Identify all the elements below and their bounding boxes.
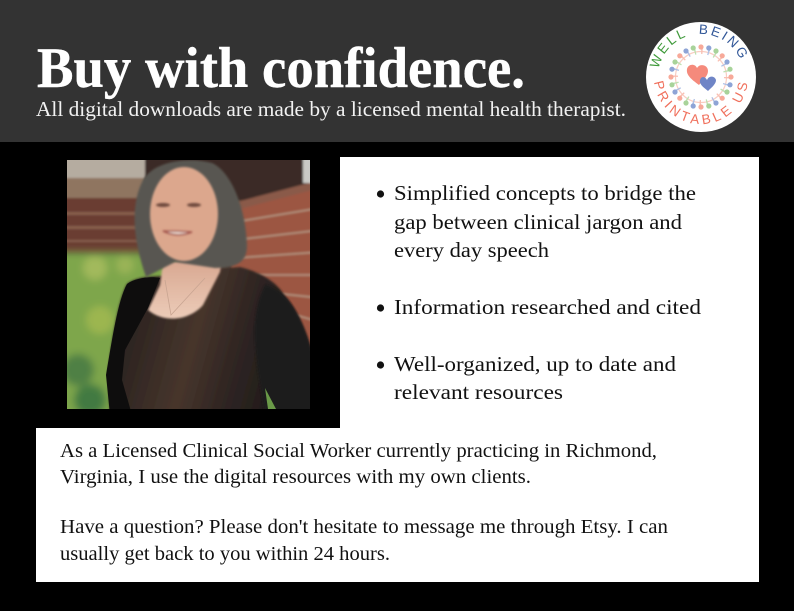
bullet 3: Well-organized, up to date and: [394, 352, 676, 376]
bullet 3: relevant resources: [394, 380, 563, 404]
photo: hair: [135, 160, 247, 277]
bullet 1: Simplified concepts to bridge the: [394, 181, 696, 205]
photo: necklace: [165, 278, 205, 315]
logo badge: [646, 22, 756, 132]
logo text: well being: WELL BEING: [650, 24, 747, 66]
photo: green foliage: [67, 246, 177, 409]
bullet 2: Information researched and cited: [394, 295, 701, 319]
title: Buy with confidence.: [37, 37, 525, 100]
photo: arm shadow: [254, 286, 310, 394]
logo: ring of people: [668, 44, 734, 110]
photo: foliage gap by the arm: [265, 388, 276, 409]
panel: benefits: [340, 157, 759, 439]
logo: coral heart: [687, 65, 708, 85]
photo: face: [150, 167, 218, 261]
about text: usually get back to you within 24 hours.: [60, 544, 390, 565]
photo: background building: [67, 160, 310, 348]
panel: about the therapist: [36, 428, 759, 582]
photo: jacket lapel: [106, 277, 160, 415]
about text: [60, 441, 668, 565]
photo: black top: [108, 267, 312, 415]
photo: eyes and smile: [156, 203, 201, 235]
about text: Have a question? Please don't hesitate to message me through Etsy. I can: [60, 517, 668, 538]
bullet list: [377, 181, 701, 404]
bullet 3: [377, 352, 676, 404]
header band: [0, 0, 794, 142]
portrait photo: [67, 160, 310, 409]
bullet 1: gap between clinical jargon and: [394, 210, 682, 234]
bullet 1: every day speech: [394, 238, 549, 262]
subtitle: All digital downloads are made by a licensed mental health therapist.: [36, 97, 626, 121]
about text: Virginia, I use the digital resources with my own clients.: [60, 467, 531, 488]
logo: blue heart: [700, 77, 716, 91]
bullet 1: [377, 181, 696, 262]
about text: As a Licensed Clinical Social Worker currently practicing in Richmond,: [60, 441, 657, 462]
logo text: printable us: PRINTABLE US: [654, 80, 748, 124]
photo: neck and chest: [148, 258, 222, 319]
